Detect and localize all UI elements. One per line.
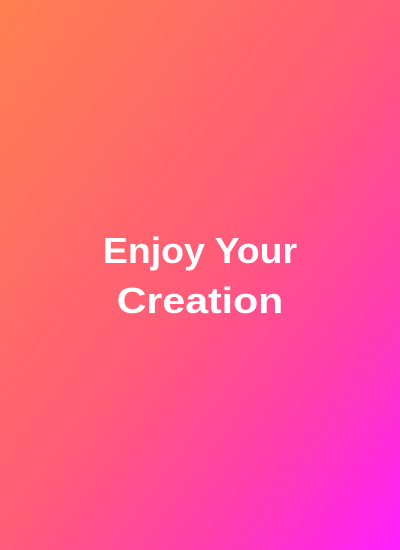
title: Creation: [117, 280, 283, 321]
title: Enjoy Your: [103, 230, 297, 271]
title: [103, 230, 297, 321]
